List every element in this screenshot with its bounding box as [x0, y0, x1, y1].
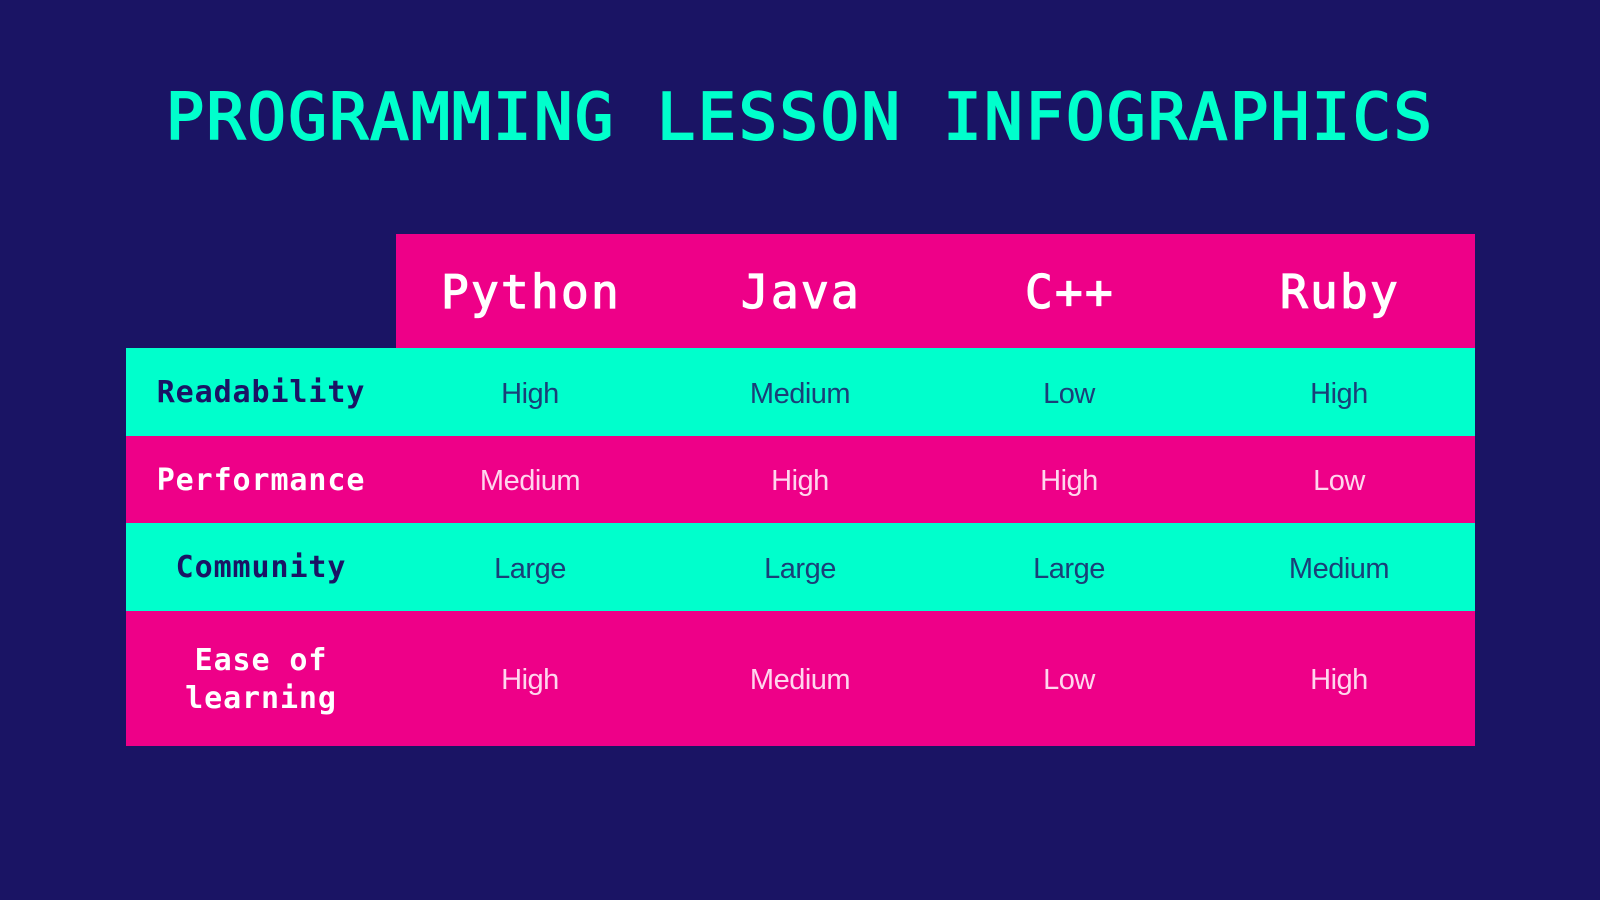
cell: Ruby performance: Low [1313, 465, 1365, 497]
column heading: Python: Python [441, 265, 621, 319]
cell: Ruby community: Medium [1289, 552, 1389, 584]
cell: Ruby readability: High [1310, 378, 1368, 410]
row label: Readability: Readability [157, 375, 365, 410]
cell: Python performance: Medium [480, 465, 580, 497]
cell: Java performance: High [771, 465, 829, 497]
cell: Python community: Large [494, 552, 566, 584]
table header row [396, 234, 1475, 348]
row label: Ease of learning: Ease of [195, 643, 327, 678]
row: Performance [126, 436, 1475, 523]
cell: Java community: Large [764, 552, 836, 584]
row: Ease of learning [126, 611, 1475, 746]
row label: Community: Community [176, 550, 346, 585]
column heading: Ruby: Ruby [1280, 265, 1400, 319]
title: PROGRAMMING LESSON INFOGRAPHICS [166, 81, 1434, 155]
row: Community [126, 523, 1475, 611]
row label: Performance: Performance [157, 463, 365, 498]
cell: C++ performance: High [1040, 465, 1098, 497]
cell: Python ease of learning: High [501, 664, 559, 696]
cell: Java readability: Medium [750, 378, 850, 410]
row: Readability [126, 348, 1475, 436]
column heading: C++: C++ [1025, 265, 1115, 319]
column heading: Java: Java [741, 265, 861, 319]
row label: Ease of learning: learning [185, 680, 337, 716]
cell: Ruby ease of learning: High [1310, 664, 1368, 696]
cell: Python readability: High [501, 378, 559, 410]
cell: C++ readability: Low [1043, 378, 1095, 410]
row label: Ease of learning [185, 643, 337, 716]
cell: C++ ease of learning: Low [1043, 664, 1095, 696]
cell: Java ease of learning: Medium [750, 664, 850, 696]
cell: C++ community: Large [1033, 552, 1105, 584]
